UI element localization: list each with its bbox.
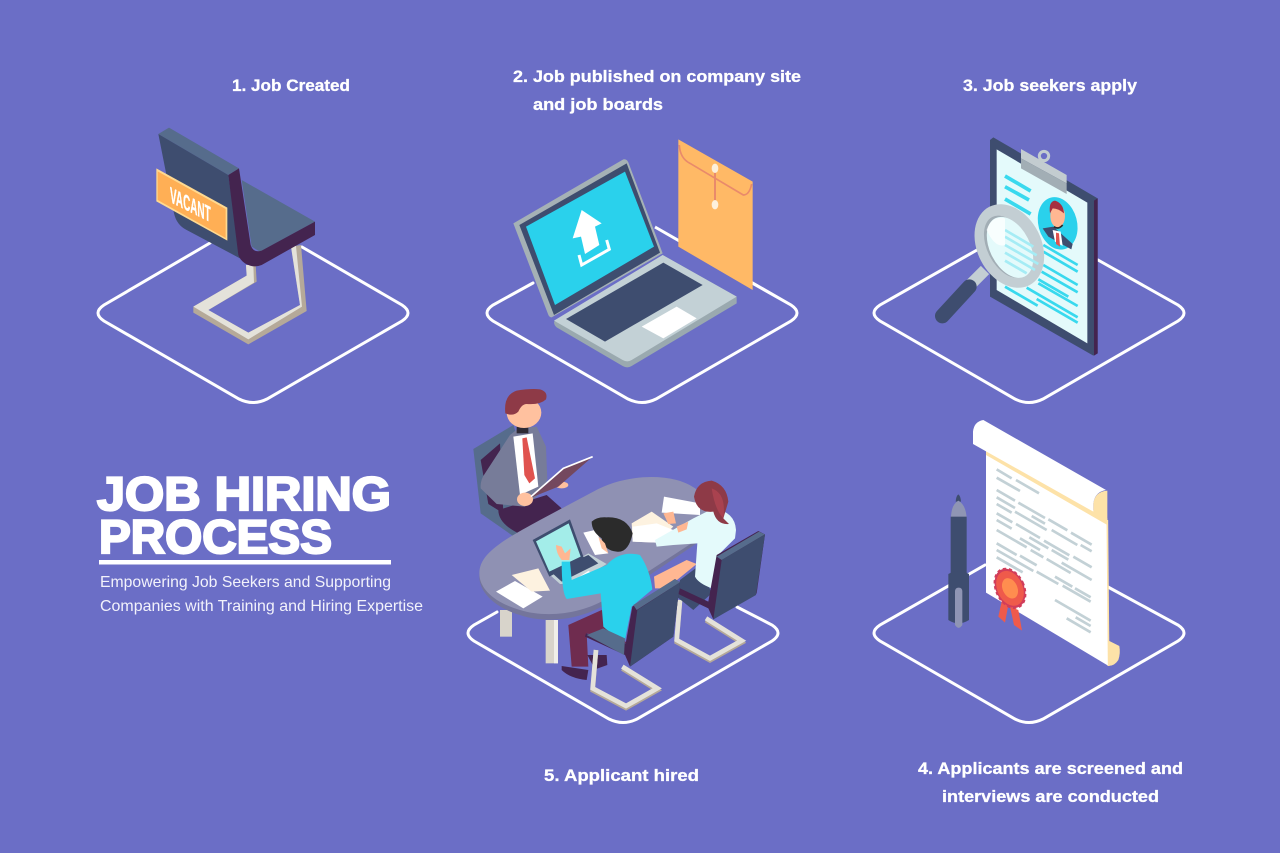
table legs (500, 610, 558, 663)
woman shirt (655, 508, 736, 588)
envelope (678, 139, 753, 290)
platform outline: step 1 (98, 243, 408, 402)
shirt (513, 433, 538, 495)
portrait (1032, 193, 1083, 254)
laptop lid (513, 159, 663, 317)
front chair frame (593, 650, 657, 708)
icon: resume on clipboard with magnifier (942, 137, 1098, 356)
sign: vacant (156, 168, 227, 241)
touchpad (642, 307, 697, 338)
heading: step 2 (513, 67, 801, 114)
icon: laptop with upload arrow (513, 139, 753, 367)
woman lower body (677, 565, 712, 610)
front chair (585, 579, 680, 667)
heading: step 2: 2. Job published on company site (513, 67, 801, 86)
heading: step 2: and job boards (533, 95, 663, 114)
heading: step 4 (918, 759, 1183, 806)
heading: step 4: 4. Applicants are screened and (918, 759, 1183, 778)
screen (526, 172, 654, 305)
keyboard (566, 263, 703, 342)
chair back (158, 134, 240, 258)
woman legs (654, 560, 697, 588)
upload arrow (573, 210, 602, 254)
platform outline: step 2 (487, 227, 797, 402)
chair frame (193, 245, 307, 344)
paper (986, 450, 1109, 666)
clipboard board (990, 137, 1098, 356)
heading: step 1: 1. Job Created (232, 76, 350, 95)
title block (97, 467, 423, 615)
interviewer torso (481, 427, 547, 507)
right chair frame (677, 600, 742, 660)
tie (522, 437, 535, 483)
man shirt (562, 554, 652, 640)
clip (1021, 149, 1067, 194)
interviewer legs (498, 495, 562, 533)
magnifier (942, 192, 1058, 316)
icon: vacant chair (156, 128, 315, 344)
laptop base (554, 255, 737, 367)
papers (496, 497, 700, 608)
icon: meeting at table (473, 389, 765, 708)
platform outline: step 5 (468, 607, 778, 722)
interviewer head (505, 389, 547, 433)
man trousers (562, 610, 627, 680)
interviewer hand (517, 493, 533, 506)
chair seat top (242, 180, 315, 252)
right chair (678, 531, 765, 619)
platform outline: step 3 (874, 250, 1184, 402)
woman hands (663, 512, 688, 533)
title block: JOB HIRING (97, 467, 391, 520)
heading: step 4: interviews are conducted (942, 787, 1159, 806)
title block: Empowering Job Seekers and Supporting (100, 574, 391, 591)
pen (948, 494, 969, 628)
resume paper (997, 149, 1087, 343)
heading: step 3: 3. Job seekers apply (963, 76, 1138, 95)
book (531, 457, 593, 497)
title block: Companies with Training and Hiring Expertise (100, 598, 423, 615)
sign: vacant: VACANT (170, 182, 211, 227)
paper shadow strip (986, 448, 1107, 525)
man hand (556, 545, 571, 560)
seal (989, 564, 1031, 631)
team laptop (533, 519, 607, 584)
upload tray (579, 240, 609, 265)
chair side (228, 168, 315, 266)
platform outline: step 4 (874, 565, 1184, 722)
heading: step 5: 5. Applicant hired (544, 766, 699, 785)
top roll (973, 420, 1107, 524)
resume text lines (1005, 176, 1078, 323)
contract text (997, 469, 1092, 632)
table (479, 477, 710, 620)
bottom curl (1107, 640, 1120, 666)
woman head (694, 481, 729, 524)
chair back top (158, 128, 239, 175)
title block: PROCESS (99, 510, 332, 563)
icon: contract with pen and seal (948, 420, 1120, 666)
man hair (592, 517, 633, 552)
chair: interviewer (473, 425, 520, 537)
